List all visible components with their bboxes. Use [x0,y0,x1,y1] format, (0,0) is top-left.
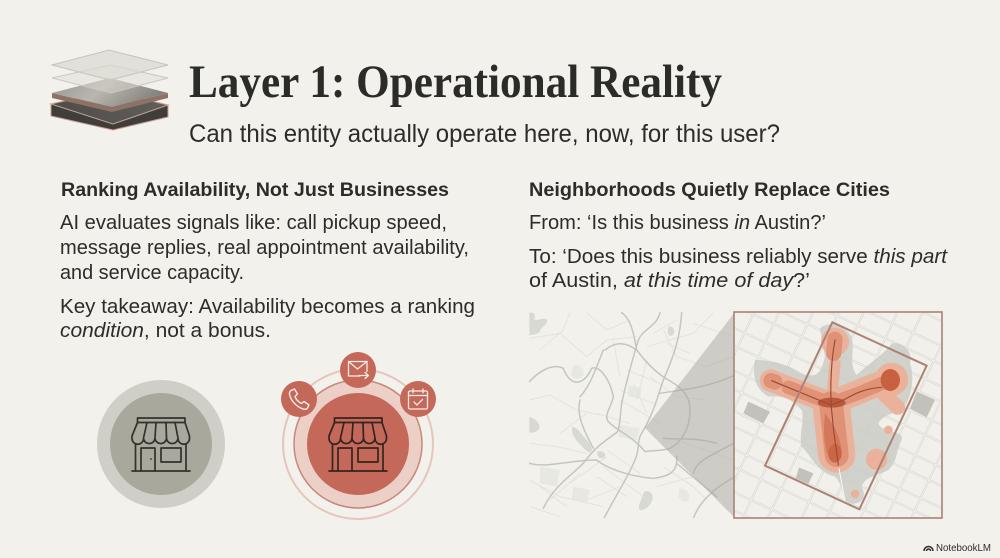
service area outline [765,322,927,509]
right column heading: Neighborhoods Quietly Replace Cities [529,179,890,201]
heatmap: outer grey zone [754,324,912,504]
zoom cone connecting map to detail [645,312,735,518]
title: Layer 1: Operational Reality [189,56,722,108]
heatmap: hot core [771,339,890,455]
to statement: To: ‘Does this business reliably serve this part [529,246,948,268]
left body text [60,212,469,284]
storefront glyph [329,418,387,471]
left body text: AI evaluates signals like: call pickup speed, [60,212,447,234]
heatmap: light orange zone [760,328,908,498]
minor streets [529,313,733,517]
grey city blocks [743,392,935,484]
left body text: and service capacity. [60,262,244,284]
to statement: of Austin, at this time of day ?’ [529,270,810,292]
icon: available storefront with contact channels [281,352,436,519]
key takeaway: condition, not a bonus. [60,320,271,342]
key takeaway [60,296,475,342]
neighborhood detail map [734,312,942,518]
left column heading: Ranking Availability, Not Just Businesses [61,179,449,201]
subtitle: Can this entity actually operate here, now, for this user? [189,120,780,148]
icon: phone [281,381,317,417]
icon: calendar [400,381,436,417]
icon: grey storefront [97,380,225,508]
NotebookLM watermark: NotebookLM [936,542,991,554]
left body text: message replies, real appointment availability, [60,237,469,259]
icon: stacked layers [51,50,168,130]
to statement [529,246,948,292]
street grid [734,312,942,518]
from statement: From: ‘Is this business in Austin?’ [529,212,826,234]
heatmap: corridor lines [772,340,882,465]
city map [529,313,735,518]
lakes and parks [529,313,674,510]
major roads [529,313,735,518]
icon: message [340,352,376,388]
key takeaway: Key takeaway: Availability becomes a ranking [60,296,475,318]
